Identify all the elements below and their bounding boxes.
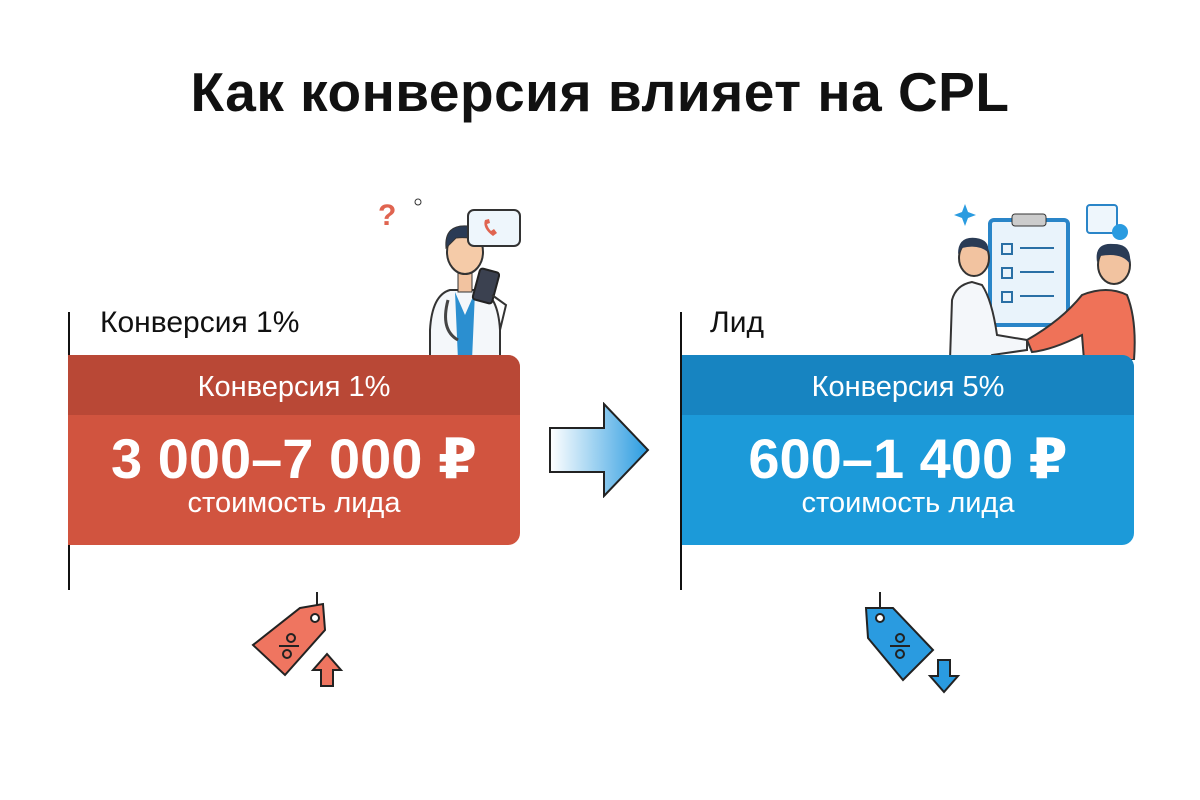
vertical line left	[68, 312, 70, 590]
card: red: 3 000–7 000 ₽	[111, 427, 477, 490]
label right: Лид	[710, 306, 764, 339]
card: blue: Конверсия 5%	[812, 371, 1004, 403]
card: red	[68, 355, 520, 545]
card: blue	[682, 355, 1134, 545]
icon: price tag down	[864, 592, 960, 694]
card: blue: 600–1 400 ₽	[748, 427, 1068, 490]
title: Как конверсия влияет на CPL	[191, 61, 1009, 123]
arrow	[549, 402, 650, 498]
illustration: handshake with clipboard	[949, 204, 1136, 360]
icon: price tag up	[252, 592, 344, 687]
vertical line right	[680, 312, 682, 590]
card: red: стоимость лида	[188, 487, 400, 519]
illustration: doctor with phone: ?	[378, 199, 396, 232]
illustration: doctor with phone	[378, 198, 521, 355]
panel: right conversion 5%	[680, 204, 1136, 590]
panel: left conversion 1%	[68, 198, 521, 590]
label left: Конверсия 1%	[100, 306, 299, 339]
card: blue: стоимость лида	[802, 487, 1014, 519]
card: red: Конверсия 1%	[198, 371, 390, 403]
